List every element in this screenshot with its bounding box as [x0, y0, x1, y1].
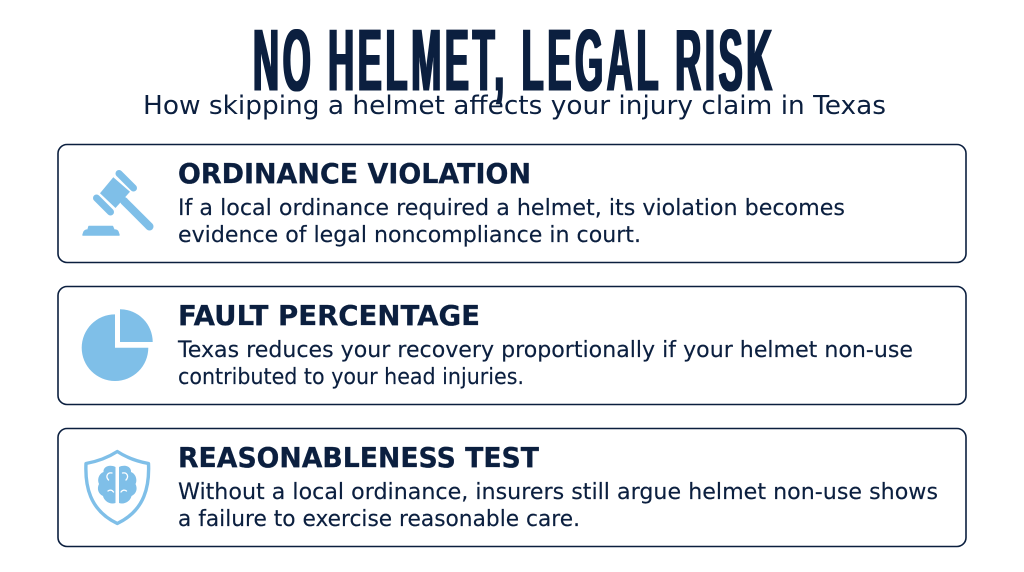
icon: pie chart — [82, 309, 153, 381]
subtitle: How skipping a helmet affects your injury claim in Texas — [143, 91, 886, 121]
panel: reasonableness test — [58, 428, 966, 546]
text: reasonableness test: Without a local ordinance, insurers still argue helmet non-use shows — [178, 479, 938, 505]
panel: ordinance violation — [58, 144, 966, 262]
text: fault percentage: contributed to your head injuries. — [178, 364, 524, 390]
text: ordinance violation: evidence of legal noncompliance in court. — [178, 222, 641, 248]
icon: shield with brain — [86, 452, 149, 524]
icon: gavel — [83, 174, 150, 235]
text: fault percentage: Texas reduces your recovery proportionally if your helmet non-use — [177, 337, 913, 363]
panel: fault percentage — [58, 286, 966, 404]
heading: fault percentage: FAULT PERCENTAGE — [178, 300, 480, 332]
text: ordinance violation — [178, 195, 845, 248]
text: reasonableness test: a failure to exercise reasonable care. — [178, 506, 580, 532]
heading: reasonableness test: REASONABLENESS TEST — [178, 442, 539, 474]
text: reasonableness test — [178, 479, 938, 532]
text: fault percentage — [177, 337, 913, 390]
heading: ordinance violation: ORDINANCE VIOLATION — [178, 158, 531, 190]
text: ordinance violation: If a local ordinance required a helmet, its violation becomes — [178, 195, 845, 221]
